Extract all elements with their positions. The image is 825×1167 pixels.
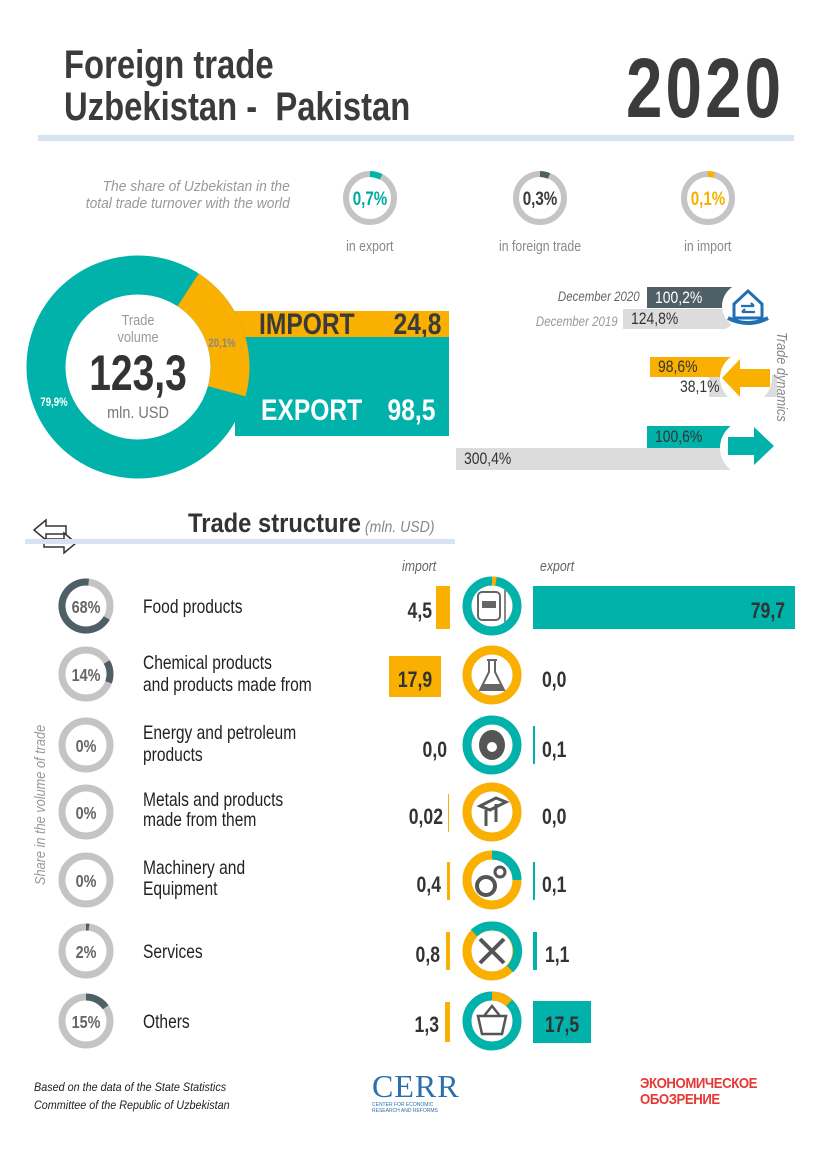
share labels: in export <box>346 238 394 255</box>
share text <box>86 178 290 212</box>
donut: trade volume <box>26 256 250 478</box>
footer: source <box>34 1080 230 1112</box>
row: metals: 0,02 <box>409 805 443 830</box>
trade dynamics: 98,6% <box>658 357 698 376</box>
structure chart <box>58 576 795 1050</box>
logo: economic review: ЭКОНОМИЧЕСКОЕ <box>640 1075 757 1092</box>
logo: CERR: CERR <box>372 1068 460 1104</box>
row: energy: 0,0 <box>423 738 447 763</box>
trade dynamics: 124,8% <box>631 309 678 328</box>
circle: import share <box>684 174 732 222</box>
icon: import arrow <box>722 359 770 397</box>
row: energy <box>62 720 566 770</box>
circle: export share <box>346 174 394 222</box>
logo: economic review <box>640 1075 757 1108</box>
import band <box>235 311 449 338</box>
import band: 24,8 <box>393 308 441 341</box>
row: metals: 0% <box>76 804 97 823</box>
export band: EXPORT <box>261 394 362 427</box>
row: metals <box>62 787 566 837</box>
icon: export arrow <box>728 427 774 465</box>
row: chemical: 17,9 <box>398 668 432 693</box>
trade dynamics: December 2019 <box>536 313 618 329</box>
trade dynamics <box>456 287 790 470</box>
share labels <box>346 238 732 255</box>
export band <box>235 337 449 436</box>
text: export <box>540 558 574 575</box>
row: others <box>62 996 591 1046</box>
row: machinery: 0% <box>76 872 97 891</box>
dynamics: export <box>456 448 746 470</box>
row: food <box>53 573 795 639</box>
icon: house exchange <box>722 282 774 330</box>
share labels: in foreign trade <box>499 238 581 255</box>
circle: foreign trade share: 0,3% <box>523 187 557 209</box>
dynamics: import <box>709 375 777 397</box>
share labels: in import <box>684 238 732 255</box>
row: food: 68% <box>72 598 101 617</box>
title: Foreign trade <box>64 43 274 87</box>
row: chemical: 14% <box>72 666 101 685</box>
row: others: 15% <box>72 1013 101 1032</box>
footer: source: Committee of the Republic of Uzbekistan <box>34 1098 230 1112</box>
share circles <box>343 171 735 225</box>
row: energy: 0% <box>76 737 97 756</box>
row: food: 4,5 <box>408 599 432 624</box>
dynamics label: Trade dynamics <box>773 332 790 422</box>
row: services <box>62 926 569 976</box>
export band: 98,5 <box>387 394 435 427</box>
row: energy: products <box>143 744 203 765</box>
donut: trade volume: mln. USD <box>107 404 169 422</box>
row: energy: 0,1 <box>542 738 566 763</box>
row: food: Food products <box>143 596 243 617</box>
heading: trade structure: Trade structure (mln. USD) <box>188 508 435 538</box>
donut: trade volume: 79,9% <box>40 396 68 409</box>
row: machinery: 0,1 <box>542 873 566 898</box>
side label: Share in the volume of trade <box>32 725 49 885</box>
title <box>64 43 410 129</box>
donut: trade volume: Trade <box>122 311 155 328</box>
trade dynamics: 38,1% <box>680 377 720 396</box>
dynamics: export: 300,4% <box>464 449 511 468</box>
row: machinery: 0,4 <box>417 873 441 898</box>
row: metals: Metals and products <box>143 789 283 810</box>
logo: CERR: RESEARCH AND REFORMS <box>372 1108 438 1114</box>
share text: The share of Uzbekistan in the <box>103 178 290 195</box>
year: 2020 <box>626 41 784 135</box>
icon: exchange arrows <box>32 518 76 554</box>
circle: foreign trade share <box>516 174 564 222</box>
donut: trade volume: volume <box>117 328 159 345</box>
logo: CERR: CENTER FOR ECONOMIC <box>372 1102 433 1108</box>
row: others: 17,5 <box>545 1013 579 1038</box>
donut: trade volume: 20,1% <box>208 337 236 350</box>
row: chemical: 0,0 <box>542 668 566 693</box>
circle: import share: 0,1% <box>691 187 725 209</box>
row: machinery: Equipment <box>143 878 218 899</box>
row: services: 2% <box>76 943 97 962</box>
row: services: 0,8 <box>416 943 440 968</box>
row: chemical: and products made from <box>143 674 312 695</box>
row: services: Services <box>143 941 203 962</box>
row: chemical <box>53 641 566 707</box>
footer: source: Based on the data of the State Statistics <box>34 1080 226 1094</box>
row: machinery <box>62 855 566 905</box>
trade dynamics: 100,2% <box>655 288 702 307</box>
logo: economic review: ОБОЗРЕНИЕ <box>640 1091 720 1108</box>
column labels: import <box>402 558 436 575</box>
row: metals: made from them <box>143 809 256 830</box>
row: others: Others <box>143 1011 190 1032</box>
trade dynamics: 100,6% <box>655 427 702 446</box>
title: Uzbekistan - Pakistan <box>64 85 410 129</box>
row: metals: 0,0 <box>542 805 566 830</box>
share text: total trade turnover with the world <box>86 195 290 212</box>
donut: trade volume: 123,3 <box>89 344 187 401</box>
row: others: 1,3 <box>415 1013 439 1038</box>
row: machinery: Machinery and <box>143 857 245 878</box>
circle: export share: 0,7% <box>353 187 387 209</box>
row: energy: Energy and petroleum <box>143 722 296 743</box>
row: chemical: Chemical products <box>143 652 272 673</box>
row: food: 79,7 <box>751 599 785 624</box>
row: services: 1,1 <box>545 943 569 968</box>
dynamics: total: December 2020 <box>558 288 640 304</box>
import band: IMPORT <box>259 308 355 341</box>
